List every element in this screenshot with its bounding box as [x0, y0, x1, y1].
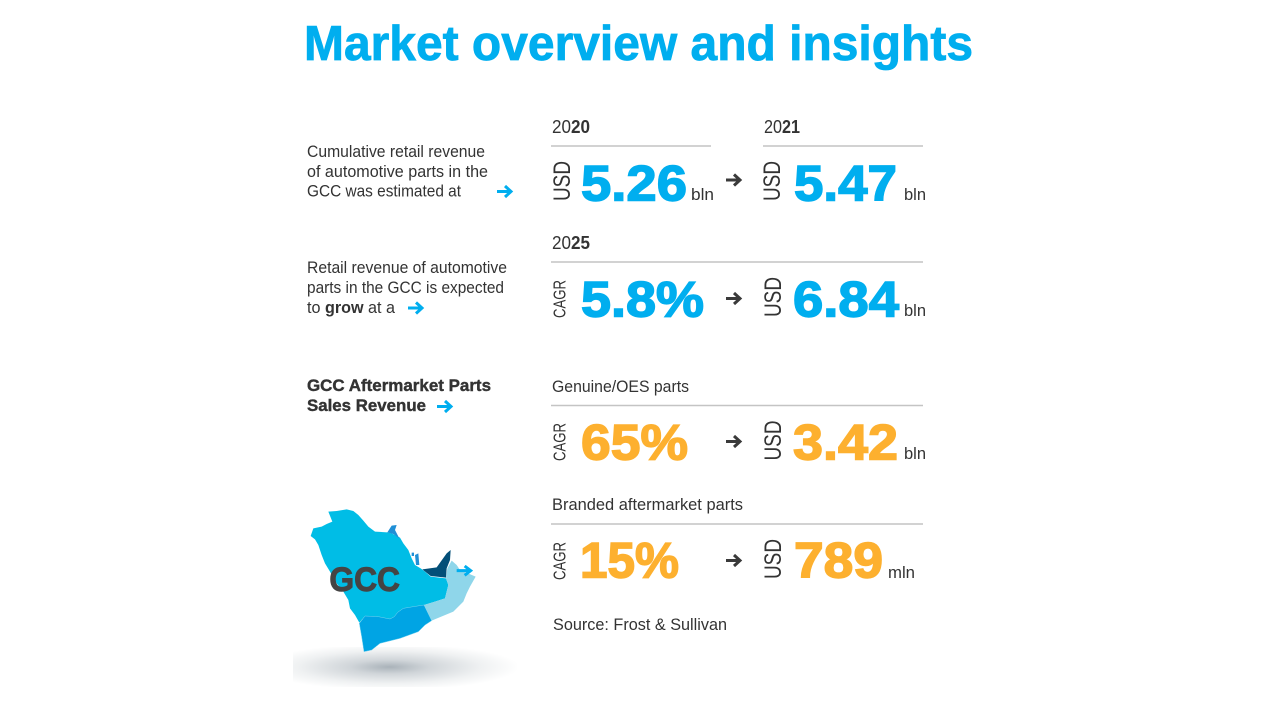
arrow: CAGR to value	[726, 293, 740, 304]
map shadow	[293, 647, 517, 687]
text block: retail revenue growth: to grow at a	[307, 298, 396, 317]
unit bln: bln	[904, 444, 926, 463]
heading: GCC aftermarket parts sales revenue: GCC Aftermarket Parts	[307, 376, 491, 395]
year 2020: 2020	[552, 117, 590, 137]
heading: GCC aftermarket parts sales revenue: Sales Revenue	[307, 396, 426, 415]
arrow: CAGR to value	[726, 436, 740, 447]
USD label 2025: USD	[760, 277, 787, 317]
value 5.47: 5.47	[794, 156, 897, 212]
GCC label: GCC	[329, 561, 400, 599]
text block: cumulative retail revenue: GCC was estimated at	[307, 182, 461, 200]
label: genuine OES parts: Genuine/OES parts	[552, 377, 689, 396]
arrow: Oman	[457, 566, 471, 575]
GCC map	[311, 509, 476, 652]
value 5.8%: 5.8%	[581, 272, 704, 328]
title: Market overview and insights	[304, 17, 973, 71]
value 5.26: 5.26	[581, 156, 687, 212]
arrow: revenue growth	[408, 302, 422, 314]
year 2025: 2025	[552, 233, 590, 253]
unit bln: bln	[904, 301, 926, 320]
panel: 2020 revenue	[549, 117, 714, 212]
arrow: CAGR to value	[726, 555, 740, 566]
CAGR label: CAGR	[550, 542, 570, 580]
panel: genuine OES parts	[550, 377, 926, 470]
text block: cumulative retail revenue	[307, 142, 488, 200]
USD label: USD	[760, 539, 787, 579]
text block: retail revenue growth	[307, 258, 507, 317]
region: UAE	[422, 550, 451, 578]
text block: retail revenue growth: parts in the GCC is expected	[307, 278, 504, 297]
panel: 2021 revenue	[759, 117, 926, 212]
unit bln: bln	[904, 185, 926, 204]
region: Kuwait	[387, 525, 399, 538]
panel: 2025 forecast	[550, 233, 926, 328]
unit mln: mln	[888, 563, 915, 582]
arrow: aftermarket heading	[437, 401, 451, 412]
value 789: 789	[794, 532, 883, 588]
value 65%: 65%	[581, 414, 688, 470]
arrow: 2020 to 2021	[726, 174, 740, 186]
region: Oman	[424, 561, 476, 621]
CAGR label: CAGR	[550, 423, 570, 461]
unit bln: bln	[691, 185, 714, 204]
CAGR label: CAGR	[550, 280, 570, 318]
arrow: revenue estimate	[497, 186, 511, 197]
year 2021: 2021	[764, 117, 800, 137]
label: branded aftermarket parts: Branded aftermarket parts	[552, 495, 743, 514]
value 15%: 15%	[580, 532, 679, 588]
USD label: USD	[760, 420, 787, 460]
heading: GCC aftermarket parts sales revenue	[307, 376, 491, 415]
region: Yemen	[359, 605, 432, 652]
panel: branded aftermarket parts	[550, 495, 923, 588]
USD label 2020: USD	[549, 161, 576, 201]
region: Saudi Arabia	[311, 509, 448, 623]
region: Qatar and Bahrain	[412, 553, 419, 565]
text block: cumulative retail revenue: of automotive parts in the	[307, 162, 488, 181]
source note: Source: Frost & Sullivan	[553, 615, 727, 634]
value 6.84: 6.84	[793, 272, 899, 328]
text block: retail revenue growth: Retail revenue of automotive	[307, 258, 507, 277]
value 3.42: 3.42	[793, 414, 898, 470]
text block: cumulative retail revenue: Cumulative retail revenue	[307, 142, 485, 161]
USD label 2021: USD	[759, 161, 786, 201]
